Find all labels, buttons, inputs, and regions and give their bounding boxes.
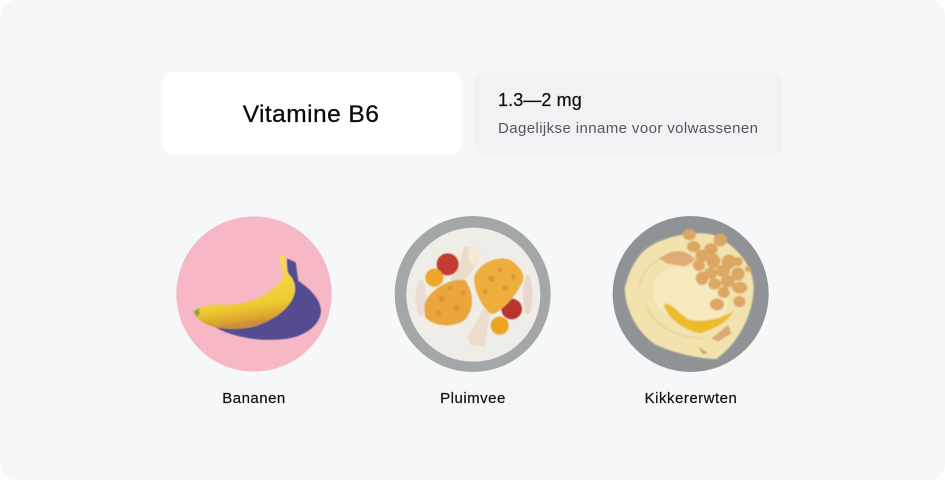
food image: poultry [394,216,551,372]
label: Pluimvee: Pluimvee [440,390,506,407]
title card [162,72,462,155]
dosage description: Dagelijkse inname voor volwassenen [498,120,758,137]
food image: hummus [612,216,769,372]
heading: Vitamine B6: Vitamine B6 [243,101,379,128]
dosage card [474,72,783,155]
label: Bananen: Bananen [222,390,286,407]
dosage value: 1.3—2 mg [498,90,582,110]
food image: banana [176,216,332,372]
label: Kikkererwten: Kikkererwten [645,390,737,407]
